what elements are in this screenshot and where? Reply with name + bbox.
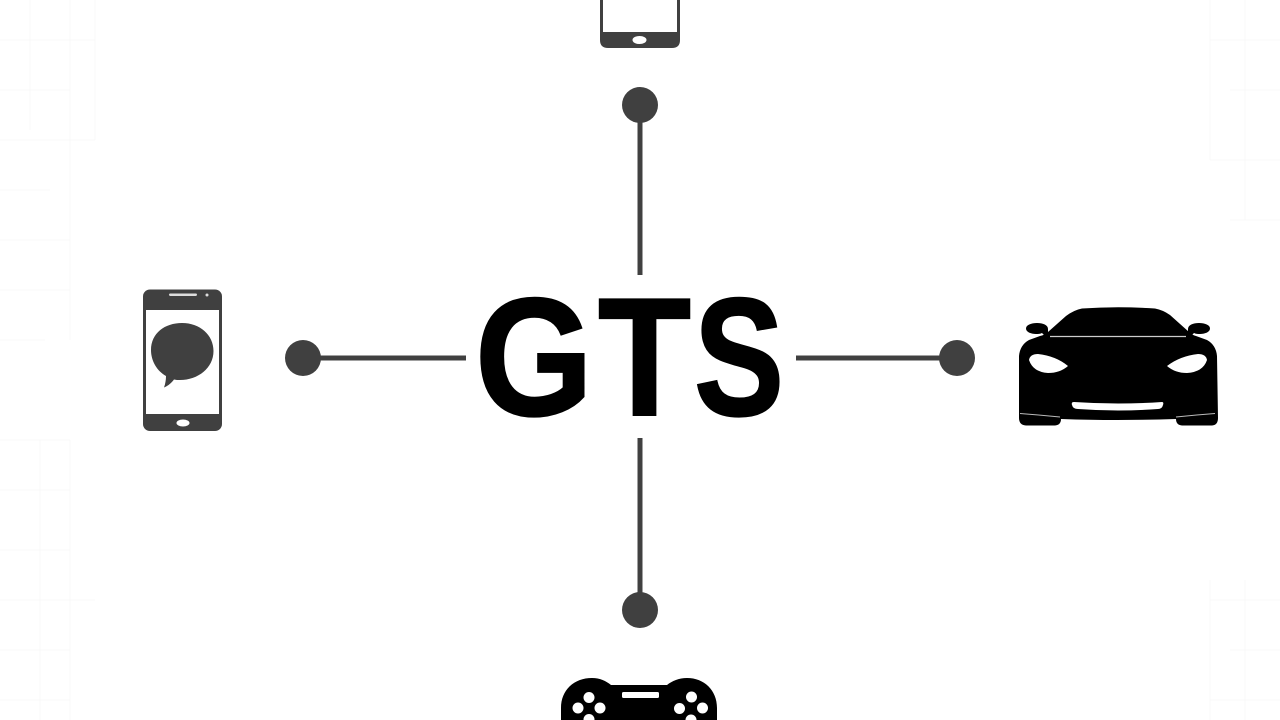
right buttons [674, 692, 708, 720]
connector: top [622, 87, 658, 275]
chat bubble [151, 323, 214, 388]
title: GTS: G [475, 263, 593, 451]
title: GTS: T [598, 263, 691, 451]
connector: right [796, 340, 975, 376]
mirrors [1026, 323, 1210, 336]
grille [1072, 402, 1163, 410]
icon: sports car front view [1019, 307, 1218, 426]
connector: bottom [622, 438, 658, 628]
title: GTS [475, 263, 784, 451]
headlights [1029, 354, 1068, 373]
connector: left [285, 340, 466, 376]
bumper lines [1020, 414, 1215, 417]
left buttons [572, 692, 606, 720]
windshield line [1050, 336, 1186, 338]
icon: smartphone with chat bubble [143, 290, 222, 431]
icon: game controller cropped at bottom [561, 678, 717, 720]
icon: smartphone cropped at top [600, 0, 680, 48]
title: GTS: S [694, 263, 784, 451]
